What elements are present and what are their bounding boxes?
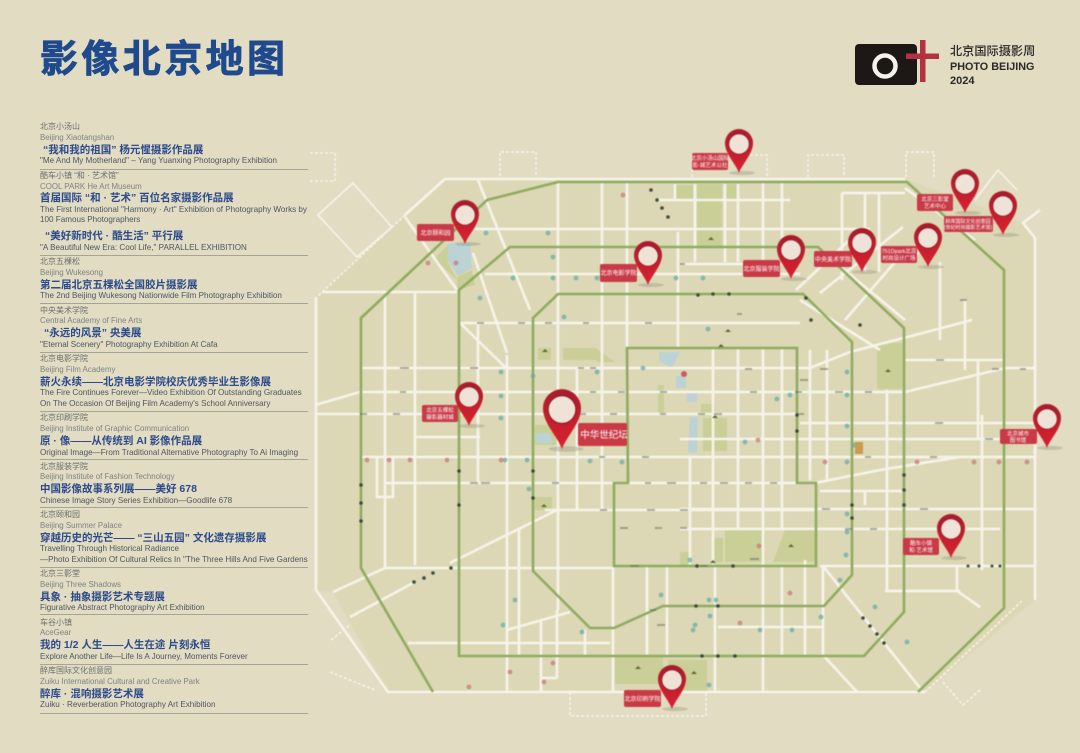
- exhibition: 醉库: Zuiku International Cultural and Creative Park: [40, 677, 200, 686]
- exhibition: 北京小汤山: “我和我的祖国” 杨元惺摄影作品展: [43, 144, 203, 156]
- green ring roads: [361, 182, 1004, 692]
- pin: 北京颐和园: 北京颐和园: [420, 229, 451, 237]
- exhibition: 车谷小镇: Explore Another Life—Life Is A Journey, Moments Forever: [40, 652, 248, 661]
- pin: 中央美术学院: 中央美术学院: [815, 256, 851, 264]
- dashed boundaries: [310, 152, 1023, 716]
- exhibition: 中央美术学院: "Eternal Scenery" Photography Exhibition At Cafa: [40, 340, 218, 349]
- exhibition: 醉库: Zuiku · Reverberation Photography Art Exhibition: [40, 700, 215, 709]
- road name labels: [360, 264, 1026, 625]
- park temple icons: [541, 237, 891, 674]
- exhibition: 北京三影堂: Figurative Abstract Photography Art Exhibition: [40, 603, 205, 612]
- logo: Photo Beijing 2024: [855, 40, 1035, 87]
- exhibition: 北京颐和园: [40, 510, 308, 568]
- landmark icons: [365, 193, 1029, 689]
- pin: 中华世纪坛: [543, 389, 628, 452]
- exhibition: 北京颐和园: Travelling Through Historical Radiance: [40, 544, 179, 553]
- pin: 醉库: (世纪时尚摄影艺术馆): [944, 224, 992, 231]
- exhibition: 北京五棵松: The 2nd Beijing Wukesong Nationwide Film Photography Exhibition: [40, 291, 282, 300]
- pin: 北京三影堂: [917, 169, 981, 215]
- exhibition: 醉库: 醉库 · 混响摄影艺术展: [40, 688, 144, 700]
- pin: 酷车小镇: [903, 514, 967, 560]
- exhibition: 北京五棵松: 北京五棵松: [40, 257, 80, 266]
- pin: 北京电影学院: 北京电影学院: [600, 269, 637, 277]
- exhibition: 北京印刷学院: Beijing Institute of Graphic Communication: [40, 424, 189, 433]
- exhibition: 北京电影学院: Beijing Film Academy: [40, 365, 115, 374]
- exhibition: 酷车小镇: COOL PARK He Art Museum: [40, 182, 142, 190]
- exhibition: 酷车小镇: "A Beautiful New Era: Cool Life," PARALLEL EXHIBITION: [40, 243, 247, 252]
- exhibition: 中央美术学院: [40, 306, 308, 353]
- pin: 北京印刷学院: [624, 665, 688, 711]
- pin: 醉库: [944, 191, 1019, 237]
- exhibition: 北京五棵松: [40, 257, 308, 304]
- exhibition: 北京服装学院: [40, 462, 308, 508]
- pin: 751D: [881, 223, 944, 269]
- title: 影像北京地图: [40, 39, 288, 81]
- exhibition: 北京服装学院: 中国影像故事系列展——美好 678: [40, 483, 197, 495]
- exhibition: 北京印刷学院: 北京印刷学院: [40, 413, 88, 422]
- pin: 北京五棵松: [422, 382, 485, 428]
- exhibition: 酷车小镇: 酷车小镇 “和 · 艺术馆”: [40, 171, 119, 180]
- exhibition: 北京电影学院: 北京电影学院: [40, 354, 88, 363]
- pin: 北京小汤山: [691, 129, 755, 175]
- exhibition: 车谷小镇: 车谷小镇: [40, 618, 72, 627]
- exhibition: 北京服装学院: Beijing Institute of Fashion Technology: [40, 472, 175, 481]
- exhibition: 中央美术学院: 中央美术学院: [40, 306, 88, 315]
- exhibition: 北京颐和园: 穿越历史的光芒—— “三山五园” 文化遗存摄影展: [40, 532, 266, 544]
- map base: [316, 179, 1035, 692]
- exhibition: 酷车小镇: [40, 171, 308, 256]
- pin: 北京印刷学院: 北京印刷学院: [624, 695, 661, 703]
- pin: 北京城市: 北京城市: [1007, 430, 1029, 438]
- exhibition: 醉库: [40, 666, 308, 714]
- pin: 北京电影学院: [600, 241, 664, 287]
- pin: 北京服装学院: 北京服装学院: [743, 265, 780, 273]
- exhibition: 北京服装学院: 北京服装学院: [40, 462, 88, 471]
- exhibition: 北京电影学院: [40, 354, 308, 412]
- pin: 中央美术学院: [814, 228, 878, 274]
- logo: Photo Beijing 2024: PHOTO BEIJING: [950, 61, 1034, 73]
- exhibition: 北京颐和园: Beijing Summer Palace: [40, 521, 122, 530]
- exhibition: 北京电影学院: On The Occasion Of Beijing Film Academy's School Anniversary: [40, 399, 270, 408]
- pin: 北京三影堂: 艺术中心: [924, 202, 946, 210]
- pin: 醉库: 醉库国际文化创意园: [945, 218, 991, 225]
- exhibition: 北京印刷学院: 原 · 像——从传统到 AI 影像作品展: [40, 435, 202, 447]
- exhibition: 北京颐和园: 北京颐和园: [40, 510, 80, 519]
- parks and lakes: [434, 184, 902, 692]
- exhibition: 酷车小镇: The First International "Harmony · Art" Exhibition of Photography Works by: [40, 205, 307, 214]
- exhibition: 酷车小镇: “美好新时代 · 酷生活” 平行展: [45, 230, 183, 242]
- pin: 北京小汤山: 影·城艺术公社: [693, 161, 728, 169]
- exhibition: 酷车小镇: 100 Famous Photographers: [40, 215, 140, 224]
- exhibition: 北京五棵松: Beijing Wukesong: [40, 268, 103, 277]
- pin: 北京小汤山: 北京小汤山国际: [691, 154, 730, 162]
- exhibition: 北京小汤山: 北京小汤山: [40, 122, 80, 131]
- exhibition: 北京三影堂: 北京三影堂: [40, 569, 80, 578]
- exhibition: 醉库: 醉库国际文化创意园: [40, 666, 112, 675]
- exhibition: 北京三影堂: 具象 · 抽象摄影艺术专题展: [40, 591, 165, 603]
- pin: 酷车小镇: 和·艺术馆: [909, 546, 933, 554]
- exhibition: 北京小汤山: [40, 122, 308, 170]
- pin: 751D: 751Dpark北京: [882, 247, 917, 255]
- pin: 北京五棵松: 北京五棵松: [426, 406, 454, 414]
- pin: 北京颐和园: [417, 200, 481, 246]
- exhibition: 北京五棵松: 第二届北京五棵松全国胶片摄影展: [40, 279, 198, 291]
- pin: 酷车小镇: 酷车小镇: [910, 539, 932, 547]
- white roads: [315, 179, 1040, 692]
- pin: 北京服装学院: [743, 235, 807, 281]
- pin: 北京城市: 图书馆: [1010, 436, 1027, 444]
- pin: 北京城市: [1000, 404, 1063, 450]
- exhibition: 北京服装学院: Chinese Image Story Series Exhibition—Goodlife 678: [40, 496, 232, 505]
- exhibition: 北京小汤山: "Me And My Motherland" – Yang Yuanxing Photography Exhibition: [40, 156, 277, 165]
- pin: 北京五棵松: 摄影器材城: [426, 413, 454, 421]
- exhibition: 北京三影堂: Beijing Three Shadows: [40, 580, 121, 589]
- exhibition: 中央美术学院: Central Academy of Fine Arts: [40, 316, 142, 325]
- exhibition: 北京印刷学院: [40, 413, 308, 460]
- pin: 北京三影堂: 北京三影堂: [921, 195, 949, 203]
- exhibition: 中央美术学院: “永远的风景” 央美展: [44, 327, 141, 339]
- subway icons: [478, 231, 909, 687]
- exhibition: 北京三影堂: [40, 569, 308, 615]
- exhibition: 北京小汤山: Beijing Xiaotangshan: [40, 133, 114, 142]
- exhibition: 北京电影学院: The Fire Continues Forever—Video Exhibition Of Outstanding Graduates: [40, 388, 302, 397]
- subway and station markers: [359, 188, 1002, 658]
- logo: Photo Beijing 2024: 2024: [950, 75, 974, 87]
- exhibition: 酷车小镇: 首届国际 “和 · 艺术” 百位名家摄影作品展: [40, 192, 234, 204]
- pin: 中华世纪坛: 中华世纪坛: [580, 429, 628, 441]
- exhibition: 车谷小镇: AceGear: [40, 628, 71, 637]
- exhibition: 北京印刷学院: Original Image—From Traditional Alternative Photography To Ai Imaging: [40, 448, 298, 457]
- pin: 751D: 时尚设计广场: [882, 254, 916, 262]
- exhibition: 车谷小镇: 我的 1/2 人生——人生在途 片刻永恒: [40, 639, 210, 651]
- exhibition: 北京电影学院: 薪火永续——北京电影学院校庆优秀毕业生影像展: [40, 376, 271, 388]
- logo: Photo Beijing 2024: 北京国际摄影周: [950, 44, 1035, 58]
- exhibition: 北京颐和园: —Photo Exhibition Of Cultural Relics In "The Three Hills And Five Gardens: [40, 555, 308, 564]
- exhibition: 车谷小镇: [40, 618, 308, 665]
